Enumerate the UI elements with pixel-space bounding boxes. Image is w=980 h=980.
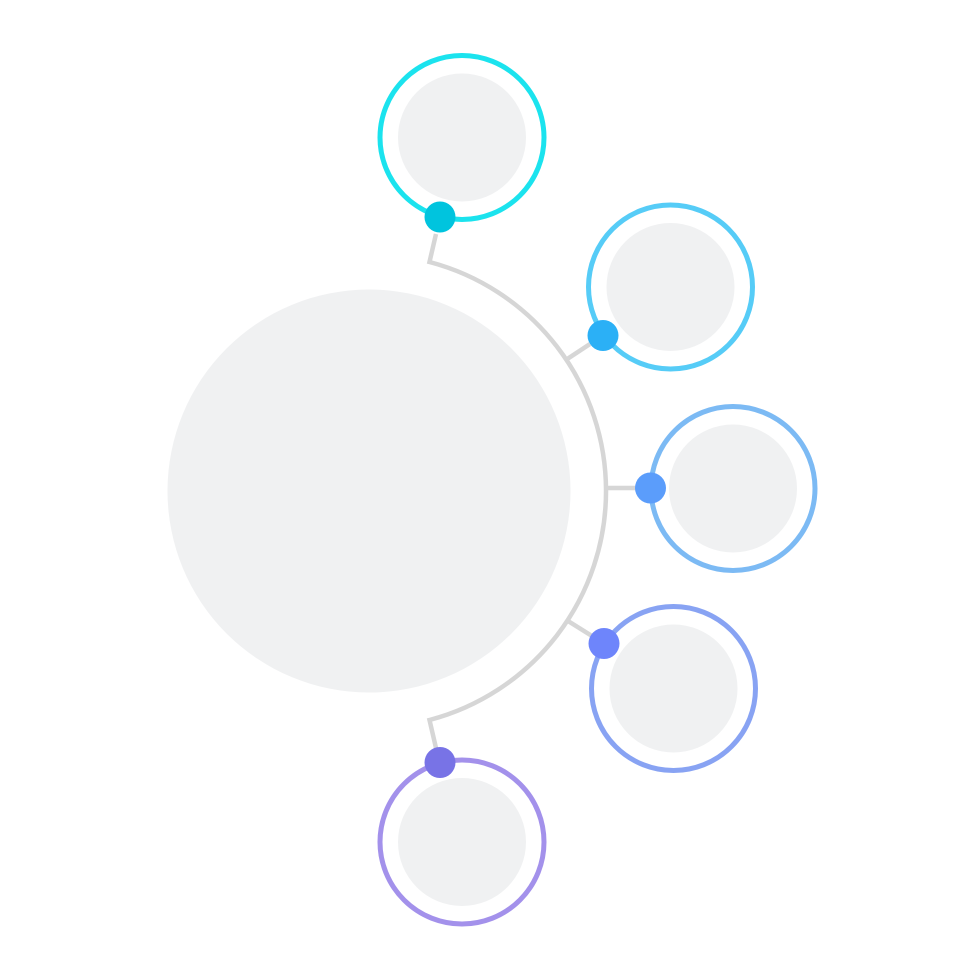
node 1 — [380, 56, 544, 232]
connector arc with branches — [430, 234, 636, 748]
node 5 — [380, 747, 544, 924]
central circle — [168, 290, 570, 692]
node 4 — [588, 606, 756, 770]
node 2 — [588, 205, 752, 369]
node 3 — [635, 406, 815, 570]
